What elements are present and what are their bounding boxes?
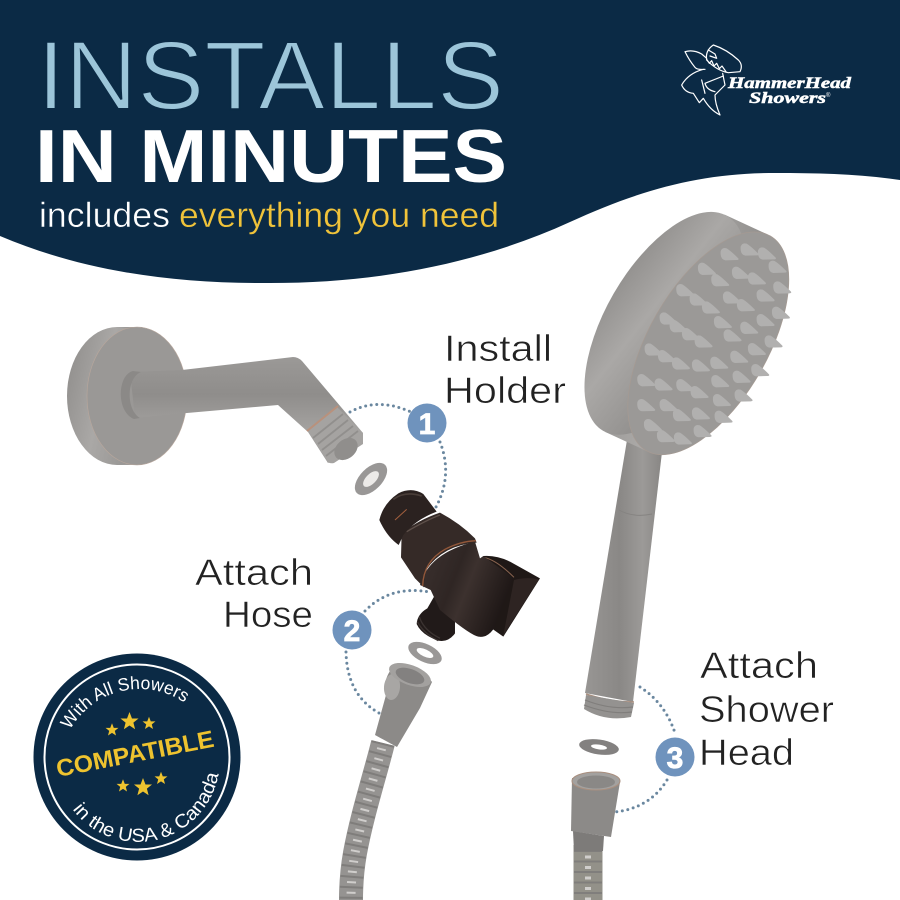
head side xyxy=(552,186,778,460)
label: Install Holder: Install xyxy=(444,328,552,369)
handle copper line xyxy=(586,694,634,702)
arm collar xyxy=(121,371,141,419)
step 3 marker: 3 xyxy=(667,742,683,775)
hose tube xyxy=(351,743,383,900)
badge top text: With All Showers xyxy=(60,676,188,727)
logo text: registered mark: ® xyxy=(826,92,831,99)
holder collar xyxy=(401,513,477,587)
label: Attach Hose xyxy=(195,552,313,635)
step 2 marker xyxy=(332,610,372,650)
handle ring xyxy=(619,510,652,515)
handle xyxy=(585,440,662,702)
holder body xyxy=(420,542,514,637)
right hose connector xyxy=(571,778,620,837)
washer 1 xyxy=(349,457,393,501)
title: IN MINUTES: IN MINUTES xyxy=(35,114,507,198)
label: Install Holder: Holder xyxy=(444,370,566,411)
badge disc xyxy=(34,654,240,860)
washer 3 xyxy=(578,737,620,757)
step 2 marker: 2 xyxy=(344,615,360,648)
step 1 marker: 1 xyxy=(419,408,435,441)
hose right xyxy=(571,772,620,900)
head face xyxy=(595,206,822,480)
logo: HammerHead Showers xyxy=(682,45,852,115)
right hose tube xyxy=(574,845,602,900)
badge stars xyxy=(106,712,167,795)
badge ring xyxy=(44,664,230,850)
label: Attach Hose: Attach xyxy=(195,552,313,593)
hand shower xyxy=(552,186,822,718)
threaded end xyxy=(307,406,363,465)
holder nut xyxy=(379,490,437,545)
logo text: HammerHead: HammerHead xyxy=(727,75,852,92)
icon: shark outline xyxy=(682,45,741,115)
hose left xyxy=(351,658,434,900)
logo text: Showers: Showers xyxy=(749,90,826,107)
shower arm xyxy=(67,327,363,465)
holder: bronze swivel bracket xyxy=(379,490,540,641)
badge: compatible xyxy=(34,654,240,860)
washer 2 xyxy=(405,637,445,669)
step 3 marker xyxy=(656,738,694,776)
hose nut xyxy=(375,665,432,747)
dotted connector 3 xyxy=(615,687,675,812)
badge main text: COMPATIBLE xyxy=(54,726,216,783)
dotted connector 1 xyxy=(350,404,446,507)
label: Install Holder xyxy=(444,328,566,411)
holder bracket xyxy=(483,556,540,637)
subtitle xyxy=(39,196,499,235)
step 1 marker xyxy=(408,404,446,442)
badge bottom text: in the USA & Canada xyxy=(73,774,219,842)
label: Attach Shower Head xyxy=(699,645,834,773)
label: Attach Shower Head: Head xyxy=(699,732,794,773)
right hose neck xyxy=(573,831,604,851)
arm pipe xyxy=(130,357,363,463)
holder spout xyxy=(417,595,455,641)
nozzles xyxy=(637,243,791,445)
label: Attach Shower Head: Attach xyxy=(700,645,818,686)
head xyxy=(552,186,822,480)
flange xyxy=(67,327,187,465)
label: Attach Shower Head: Shower xyxy=(699,689,834,730)
title: INSTALLS: INSTALLS xyxy=(37,21,504,130)
dotted connector 2 xyxy=(346,591,430,713)
header wave background xyxy=(0,0,900,283)
subtitle: includes: includes xyxy=(39,196,170,235)
handle thread xyxy=(584,695,634,718)
label: Attach Hose: Hose xyxy=(223,594,313,635)
subtitle: everything you need: everything you need xyxy=(179,196,499,235)
